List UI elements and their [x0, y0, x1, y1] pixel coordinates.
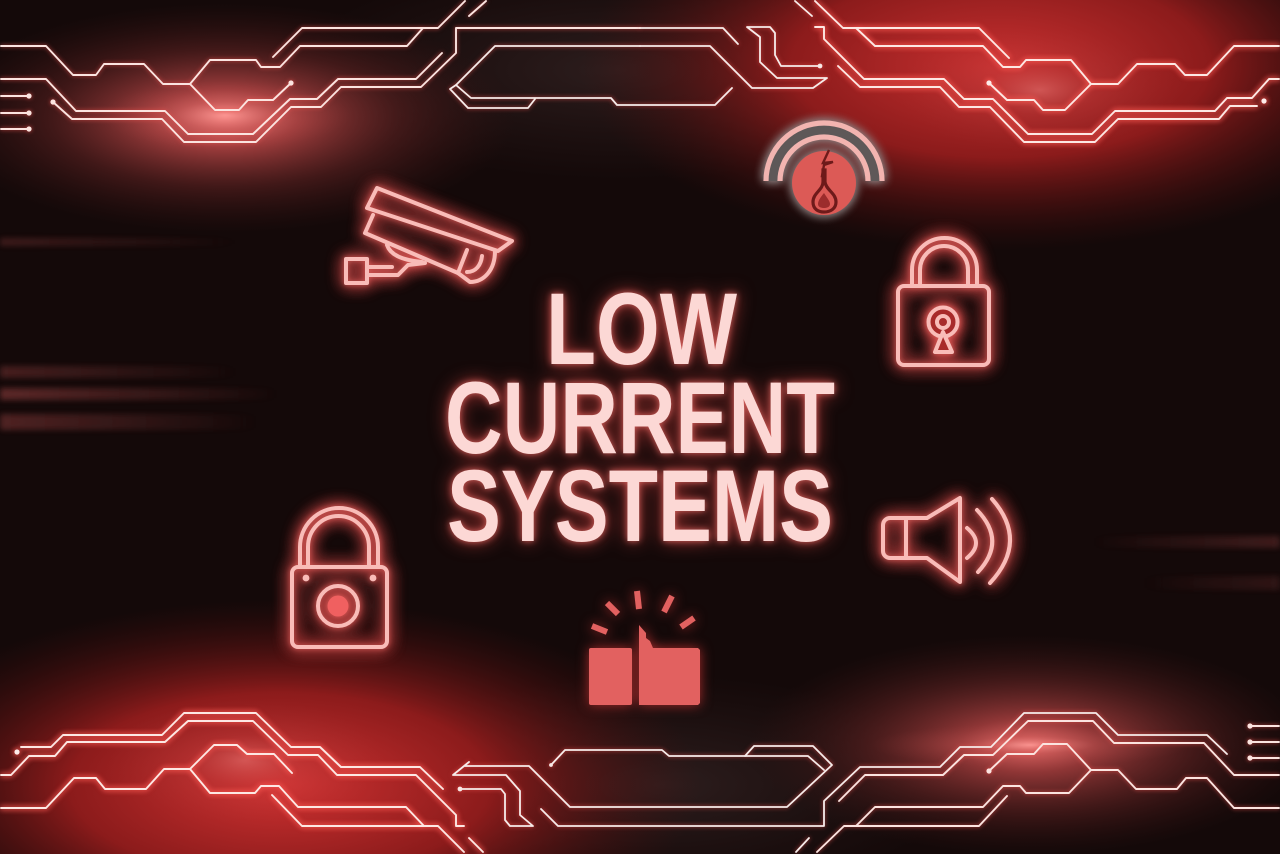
circuit traces: top centre: [450, 1, 827, 108]
circuit traces: bottom right: [817, 721, 1279, 852]
icon: padlock with sensor: [292, 508, 387, 647]
icon: security camera: [346, 188, 512, 283]
circuit traces: top right: [815, 1, 1279, 142]
icon: loudspeaker: [883, 498, 1010, 583]
circuit traces: bottom centre: [453, 713, 1227, 852]
circuit traces: bottom left: [1, 713, 483, 852]
icon: padlock with keyhole: [898, 238, 989, 365]
icon: fire alarm sensor: [766, 123, 882, 215]
title: CURRENT: [445, 361, 835, 475]
title: SYSTEMS: [447, 449, 833, 563]
circuit traces: top left: [1, 1, 640, 142]
icon: breaking box with sparks: [589, 591, 700, 705]
title: LOW: [546, 272, 738, 386]
title: [445, 272, 835, 563]
